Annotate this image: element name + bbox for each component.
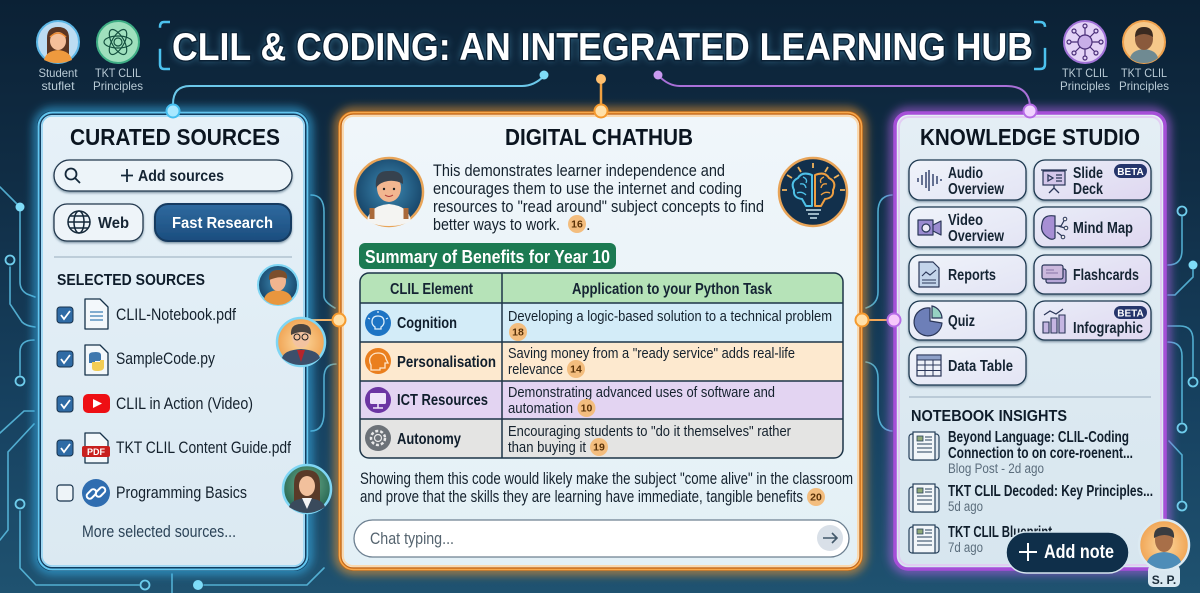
row: ict resources: Demonstrating advanced uses of software and xyxy=(508,384,775,401)
row: cognition xyxy=(365,308,832,341)
row: cognition: Developing a logic-based solution to a technical problem xyxy=(508,308,832,325)
button: slide deck: Slide xyxy=(1073,165,1103,182)
button: infographic: Infographic xyxy=(1073,320,1143,337)
button: slide deck: Deck xyxy=(1073,181,1103,198)
benefits table xyxy=(360,273,843,458)
insight: decoded: 5d ago xyxy=(948,499,983,514)
source: video: CLIL in Action (Video) xyxy=(116,395,253,413)
heading: curated sources: CURATED SOURCES xyxy=(70,124,280,150)
row: autonomy xyxy=(365,423,791,456)
button: slide deck xyxy=(1034,160,1151,200)
row: personalisation: Personalisation xyxy=(397,354,496,371)
source: sample code xyxy=(57,345,216,375)
search pill xyxy=(54,160,292,191)
row: personalisation xyxy=(365,345,795,378)
insight: beyond language: Beyond Language: CLIL-Coding xyxy=(948,429,1129,446)
button: slide deck: BETA xyxy=(1117,167,1144,178)
button: flashcards xyxy=(1034,255,1151,294)
man label: Principles xyxy=(1119,79,1169,93)
row: ict resources: 10 xyxy=(581,402,592,414)
button: infographic xyxy=(1034,301,1151,340)
fast research button xyxy=(155,204,291,241)
panel: knowledge studio xyxy=(894,112,1166,570)
row: autonomy: Encouraging students to "do it themselves" rather xyxy=(508,423,791,440)
button: reports: Reports xyxy=(948,267,996,284)
row: cognition: Cognition xyxy=(397,315,457,332)
button: mind map xyxy=(1034,207,1151,247)
button: flashcards: Flashcards xyxy=(1073,267,1139,284)
row: ict resources xyxy=(365,384,775,417)
heading: selected sources: SELECTED SOURCES xyxy=(57,272,205,289)
avatar: S.P.: S. P. xyxy=(1152,573,1176,587)
intro text: encourages them to use the internet and coding xyxy=(433,180,742,198)
student label: stuflet xyxy=(42,79,75,93)
node: curated top xyxy=(166,104,180,118)
intro text: . xyxy=(586,216,591,234)
button: video overview xyxy=(909,207,1026,247)
avatar: S.P. xyxy=(1139,520,1189,587)
button: audio overview: Overview xyxy=(948,181,1004,198)
closing text: Showing them this code would likely make the subject "come alive" in the classroom xyxy=(360,470,853,488)
principles label: Principles xyxy=(93,79,143,93)
panel: curated sources xyxy=(38,112,308,570)
row: personalisation: 14 xyxy=(570,364,582,376)
icon: man avatar xyxy=(1123,21,1165,63)
title: CLIL & CODING: AN INTEGRATED LEARNING HUB xyxy=(172,26,1033,69)
source: notebook pdf xyxy=(57,299,236,329)
insight: blueprint: TKT CLIL Blueprint xyxy=(948,524,1052,541)
student label xyxy=(38,66,78,93)
closing text: 20 xyxy=(810,492,822,504)
add note button: Add note xyxy=(1044,542,1114,563)
chat input: Chat typing... xyxy=(370,530,454,548)
heading: notebook insights: NOTEBOOK INSIGHTS xyxy=(911,408,1067,425)
button: video overview: Overview xyxy=(948,228,1004,245)
student label: Student xyxy=(38,66,78,80)
search pill: Add sources xyxy=(138,168,224,185)
button: video overview: Video xyxy=(948,212,983,229)
closing text xyxy=(360,470,853,506)
source: programming basics xyxy=(57,479,247,507)
man label xyxy=(1119,66,1169,93)
principles label right xyxy=(1060,66,1110,93)
node: studio left xyxy=(888,314,900,326)
intro text: resources to "read around" subject concepts to find xyxy=(433,198,764,216)
fast research button: Fast Research xyxy=(172,215,273,232)
button: audio overview xyxy=(909,160,1026,200)
principles label right: TKT CLIL xyxy=(1062,66,1108,80)
principles label: TKT CLIL xyxy=(95,66,141,80)
icon: brain bulb xyxy=(779,158,847,226)
node: chathub left xyxy=(332,314,346,326)
row: autonomy: 19 xyxy=(593,442,605,454)
button: data table xyxy=(909,347,1026,385)
closing text: and prove that the skills they are learning have immediate, tangible benefits xyxy=(360,488,803,506)
row: personalisation: relevance xyxy=(508,361,563,378)
add note button xyxy=(1006,532,1129,573)
insight: beyond language xyxy=(909,429,1133,476)
web button: Web xyxy=(98,215,129,232)
button: mind map: Mind Map xyxy=(1073,220,1133,237)
man label: TKT CLIL xyxy=(1121,66,1167,80)
node: chathub top xyxy=(594,104,608,118)
chat input xyxy=(354,520,849,557)
button: infographic: BETA xyxy=(1117,308,1144,320)
heading: digital chathub: DIGITAL CHATHUB xyxy=(505,124,693,150)
insight: decoded xyxy=(909,483,1153,514)
insight: blueprint: 7d ago xyxy=(948,540,983,555)
button: audio overview: Audio xyxy=(948,165,983,182)
intro text: This demonstrates learner independence and xyxy=(433,162,725,180)
node: studio top xyxy=(1024,104,1036,118)
heading: knowledge studio: KNOWLEDGE STUDIO xyxy=(920,124,1140,150)
principles label xyxy=(93,66,143,93)
principles label right: Principles xyxy=(1060,79,1110,93)
node: chathub right xyxy=(856,314,868,326)
button: reports xyxy=(909,255,1026,294)
row: autonomy: than buying it xyxy=(508,439,587,456)
source: content guide pdf: TKT CLIL Content Guide.pdf xyxy=(116,439,291,457)
avatar: boy badge xyxy=(258,265,298,305)
icon: purple network principles xyxy=(1064,21,1106,63)
intro text xyxy=(433,162,764,234)
intro text: better ways to work. xyxy=(433,216,560,234)
button: data table: Data Table xyxy=(948,358,1013,375)
insight: beyond language: Blog Post - 2d ago xyxy=(948,461,1044,476)
web button xyxy=(54,204,143,241)
table header: Application to your Python Task xyxy=(572,281,772,298)
avatar: woman xyxy=(283,465,331,513)
insight: blueprint xyxy=(909,524,1052,555)
table header: CLIL Element xyxy=(390,281,474,298)
row: ict resources: ICT Resources xyxy=(397,392,488,409)
source: content guide pdf: PDF xyxy=(87,447,106,457)
icon: green atom principles xyxy=(97,21,139,63)
title: CLIL & CODING: AN INTEGRATED LEARNING HUB xyxy=(172,26,1033,69)
source: content guide pdf xyxy=(57,433,291,463)
intro text: 16 xyxy=(571,218,583,230)
row: cognition: 18 xyxy=(512,326,524,338)
icon: student avatar large xyxy=(355,158,423,226)
button: quiz: Quiz xyxy=(948,313,975,330)
benefits pill heading xyxy=(359,243,616,269)
button: quiz xyxy=(909,301,1026,340)
insight: beyond language: Connection to on core-roenent... xyxy=(948,445,1133,462)
source: programming basics: Programming Basics xyxy=(116,484,247,502)
row: ict resources: automation xyxy=(508,400,573,417)
source: sample code: SampleCode.py xyxy=(116,350,216,368)
table header xyxy=(390,281,772,298)
benefits pill heading: Summary of Benefits for Year 10 xyxy=(365,247,610,267)
avatar: teacher with glasses xyxy=(277,318,325,366)
panel: digital chathub xyxy=(339,112,862,570)
icon: student avatar xyxy=(37,21,79,63)
row: personalisation: Saving money from a "ready service" adds real-life xyxy=(508,345,795,362)
source: notebook pdf: CLIL-Notebook.pdf xyxy=(116,306,236,324)
row: autonomy: Autonomy xyxy=(397,431,461,448)
more sources link: More selected sources... xyxy=(82,523,236,541)
source: video xyxy=(57,394,253,413)
